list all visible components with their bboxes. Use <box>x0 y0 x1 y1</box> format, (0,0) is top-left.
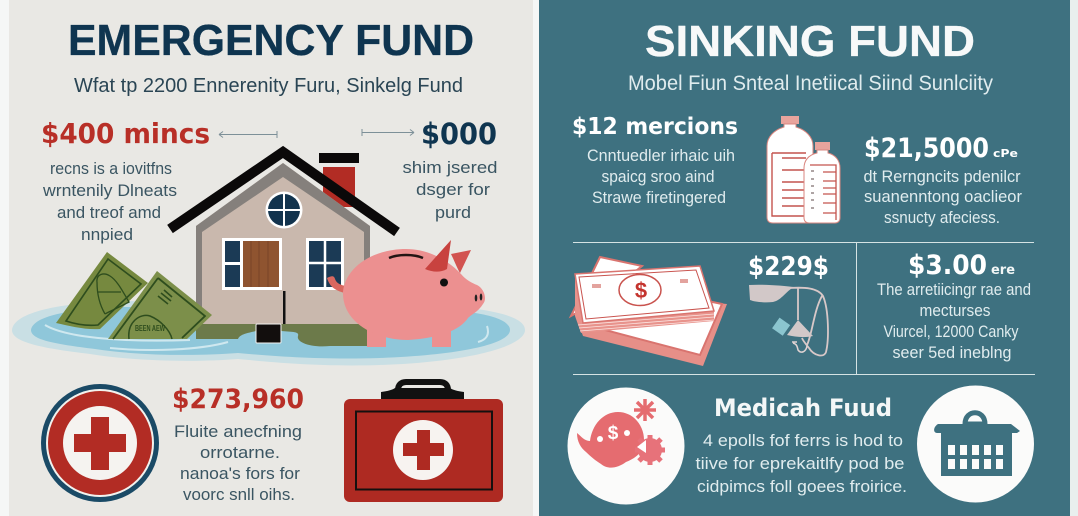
stat: $273,960: $273,960 <box>172 384 304 415</box>
heading: medicah fund: Medicah Fuud <box>714 394 892 422</box>
text block: middle right description <box>877 280 1031 362</box>
icon: piggy bank <box>327 240 485 347</box>
text block: top right description: dt Rerngncits pdenilcr <box>864 167 1021 186</box>
text block: top left description: Strawe firetingered <box>592 188 726 207</box>
icon: stack of cash: $ <box>635 278 647 303</box>
text block: bottom description: nanoa's fors for <box>180 464 300 483</box>
arrow: right pointer <box>362 129 414 136</box>
text block: top left description: Cnntuedler irhaic uih <box>587 146 735 165</box>
text block: left description: nnpied <box>81 225 133 244</box>
icon: green money <box>56 252 212 339</box>
stat: $3.00 ere: ere <box>991 263 1015 278</box>
text block: right description: purd <box>435 203 471 222</box>
title: emergency fund: EMERGENCY FUND <box>68 16 474 65</box>
stat: $400 mincs: $400 mincs <box>41 117 210 150</box>
text block: right description: dsger for <box>416 180 490 199</box>
stat: $21,5000 cPe: cPe <box>993 147 1018 160</box>
text block: left description <box>42 159 177 244</box>
text block: top right description: ssnucty afeciess. <box>884 208 1000 227</box>
stat: $229$: $229$ <box>748 252 829 282</box>
text block: top left description: spaicg sroo aind <box>602 167 714 186</box>
icon: left window with wooden shutter <box>222 238 282 290</box>
icon: round attic window <box>266 192 302 228</box>
text block: bottom description <box>696 431 907 496</box>
panel: sinking fund <box>539 0 1070 516</box>
text block: middle right description: Viurcel, 12000 Canky <box>884 322 1019 341</box>
icon: piggy with gears badge <box>568 388 684 504</box>
large bottle <box>767 116 813 223</box>
icon: house <box>170 152 397 326</box>
icon: bottles <box>767 116 840 223</box>
text block: right description <box>402 158 498 222</box>
icon: calendar basket badge <box>917 386 1034 502</box>
stat: $21,5000 cPe: $21,5000 <box>864 133 989 164</box>
icon: medical cross badge <box>41 384 159 502</box>
flood water <box>12 301 525 365</box>
ground patches <box>196 324 367 346</box>
text block: left description: wrntenily Dlneats <box>42 181 177 200</box>
icon: chimney <box>319 153 359 207</box>
text block: bottom description: orrotarne. <box>200 443 280 462</box>
icon: first aid kit <box>344 382 503 502</box>
text block: bottom description: tiive for eprekaitlfy pod be <box>696 454 904 473</box>
icon: stethoscope <box>749 285 828 355</box>
icon: piggy with gears badge: $ <box>608 423 619 444</box>
text block: middle right description: mecturses <box>920 301 990 320</box>
text block: right description: shim jsered <box>402 158 498 177</box>
panel: emergency fund <box>9 0 533 516</box>
text block: bottom description: voorc snll oihs. <box>183 485 295 504</box>
icon: green money: BEEN AEW <box>135 324 165 333</box>
text block: bottom description: cidpimcs foll goees froirice. <box>697 477 907 496</box>
text block: left description: and treof amd <box>57 203 161 222</box>
text block: bottom description: 4 epolls fof ferrs is hod to <box>703 431 903 450</box>
text block: middle right description: seer 5ed ineblng <box>892 343 1012 362</box>
text block: bottom description: Fluite anecfning <box>174 422 302 441</box>
text block: top right description <box>864 167 1022 227</box>
text block: bottom description <box>174 422 302 504</box>
subtitle: sinking fund: Mobel Fiun Snteal Inetiical Siind Sunlciity <box>628 72 993 95</box>
title: sinking fund: SINKING FUND <box>645 17 975 66</box>
icon: stack of cash <box>571 257 727 366</box>
text block: top right description: suanenntong oaclieor <box>864 187 1022 206</box>
icon: right window <box>306 238 344 290</box>
stat: $3.00 ere: $3.00 <box>908 250 987 281</box>
text block: left description: recns is a iovitfns <box>50 159 172 178</box>
small bottle <box>804 142 840 223</box>
text block: middle right description: The arretiicingr rae and <box>877 280 1031 299</box>
icon: black box <box>256 324 281 343</box>
stat: $12 mercions: $12 mercions <box>572 114 738 140</box>
subtitle: emergency fund: Wfat tp 2200 Ennerenity Furu, Sinkelg Fund <box>74 75 463 97</box>
arrow: left pointer <box>219 131 277 138</box>
stat: $000: $000 <box>421 117 497 151</box>
text block: top left description <box>587 146 735 207</box>
